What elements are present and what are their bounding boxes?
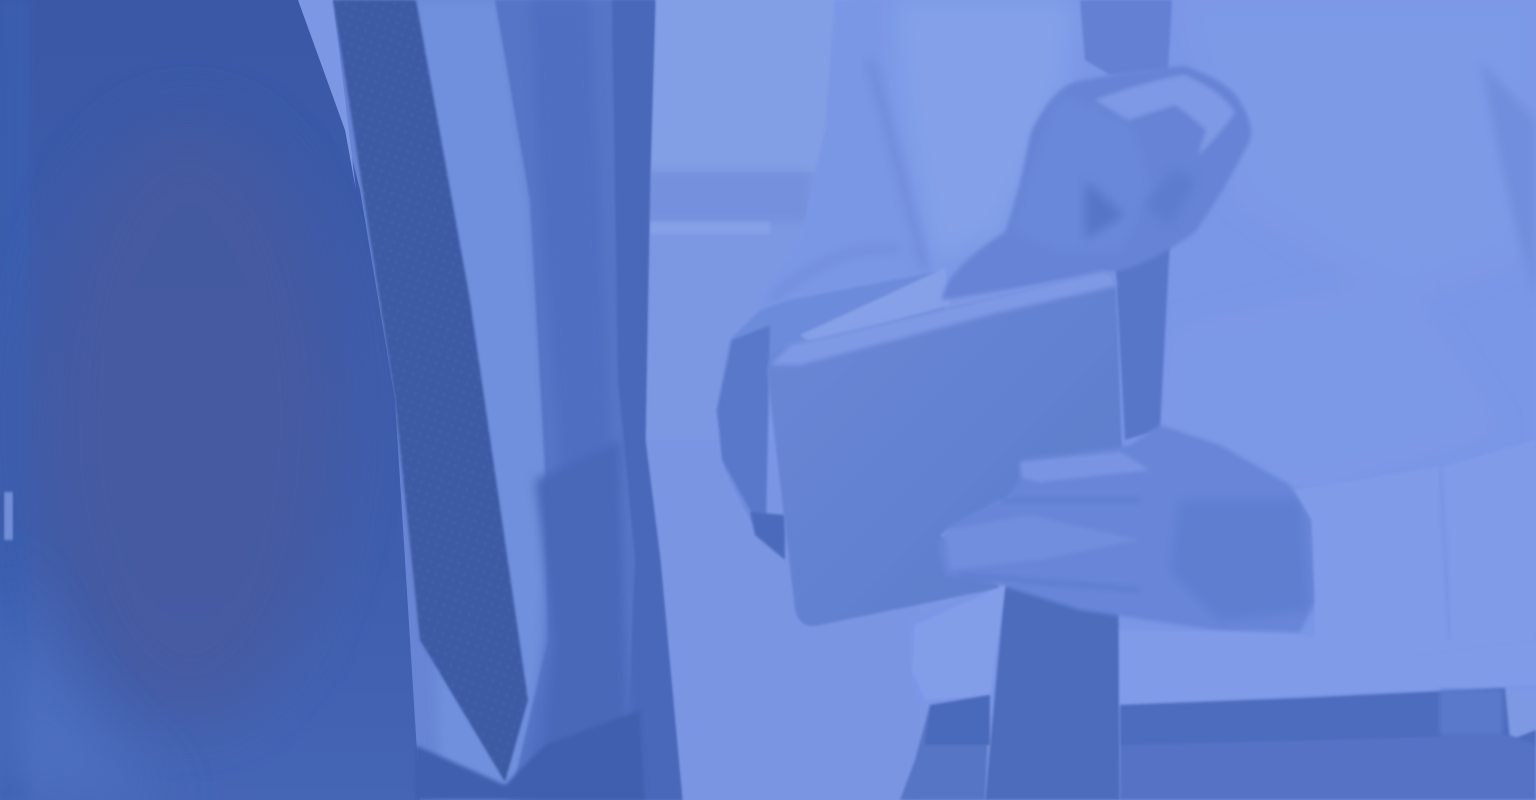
left man: dark suit jacket — [0, 0, 420, 800]
left man: belt and lower trouser detail — [415, 710, 645, 800]
left man: white shirt and trousers — [300, 0, 682, 800]
right man: belt and trousers — [900, 688, 1536, 800]
right man: lower shirt — [1120, 630, 1536, 705]
right man: left forearm sleeve — [716, 268, 950, 560]
right man: lower hand holding the tablet — [938, 425, 1316, 632]
right man: lower shirt left — [912, 585, 1005, 700]
office background — [600, 0, 940, 800]
tablet — [767, 272, 1122, 626]
right man: upper hand — [942, 66, 1251, 300]
left man: shirt collar strip — [298, 0, 356, 190]
right man: white shirt — [758, 0, 1536, 705]
left man: patterned tie — [333, 0, 528, 782]
right man: shirt cuff — [1295, 440, 1536, 655]
right man: blue tie — [985, 0, 1172, 800]
